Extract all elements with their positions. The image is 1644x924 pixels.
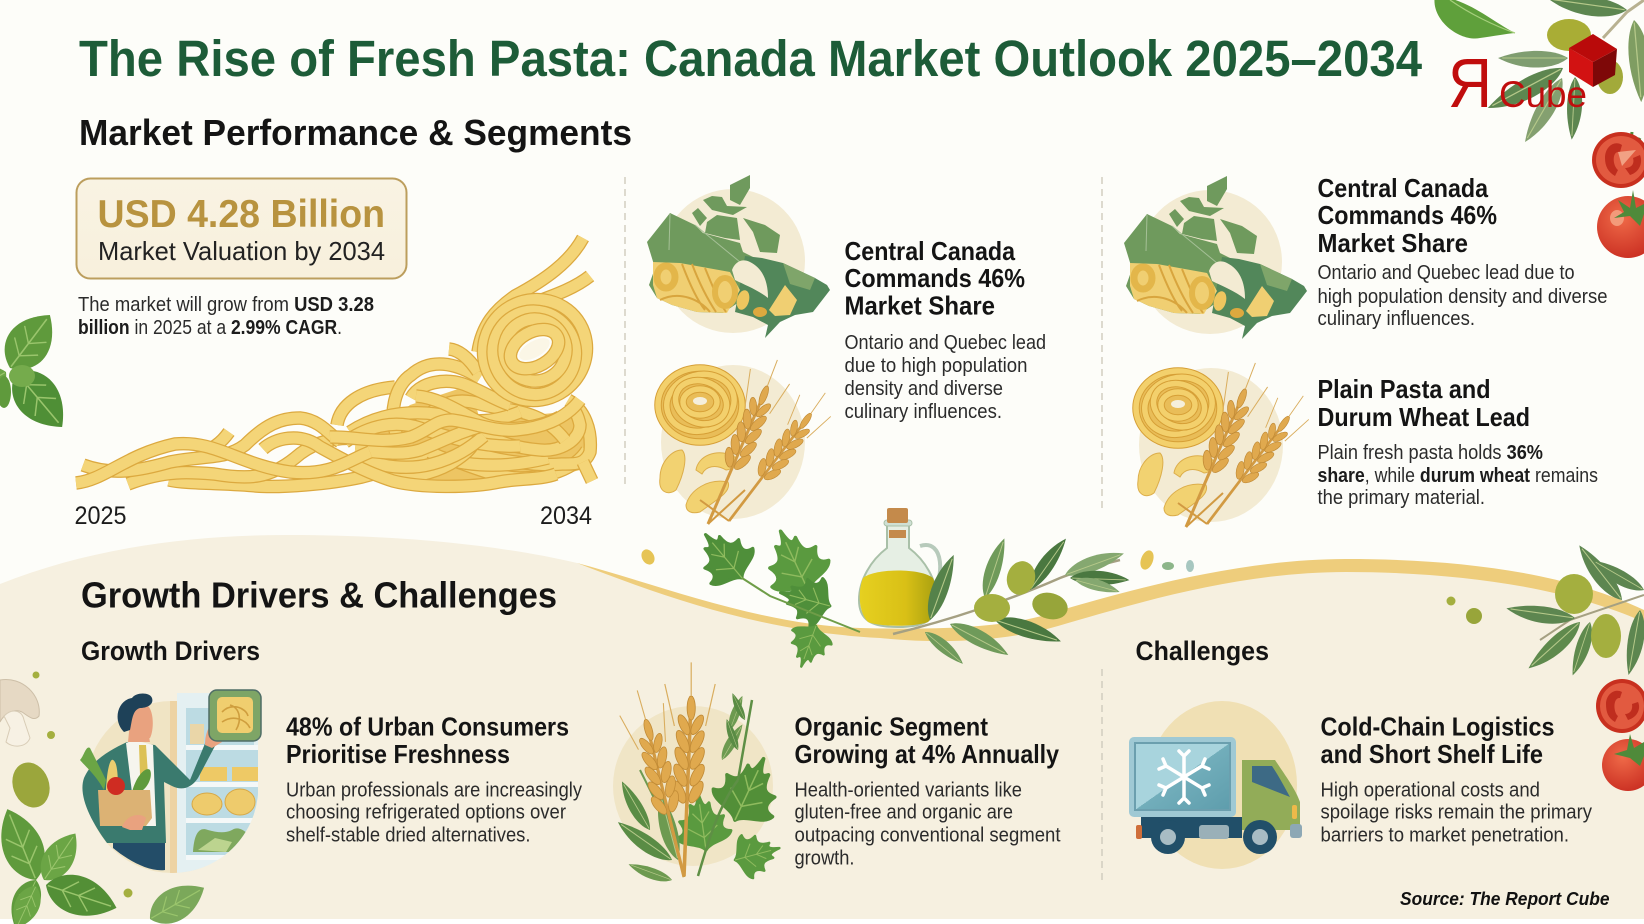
text: central canada description: high population density and diverse bbox=[1318, 285, 1608, 308]
heading: cold-chain bbox=[1320, 712, 1554, 769]
heading: organic segment bbox=[794, 712, 1059, 769]
chart: rising pasta noodles bbox=[76, 238, 605, 487]
heading: urban consumers: Prioritise Freshness bbox=[286, 739, 510, 769]
icon: wheat and herbs bbox=[613, 662, 793, 886]
heading: central canada: Commands 46% bbox=[1318, 200, 1497, 230]
text: cold-chain description: barriers to market penetration. bbox=[1320, 824, 1569, 846]
bottom white strip bbox=[0, 919, 1644, 924]
panel: plain pasta and durum wheat bbox=[1136, 355, 1598, 537]
decoration: right tomatoes bottom bbox=[1596, 679, 1644, 791]
heading: central canada: Commands 46% bbox=[844, 263, 1025, 293]
text: growth summary: The market will grow from USD 3.28 bbox=[78, 293, 374, 316]
icon: olive oil bottle bbox=[859, 508, 940, 627]
text: central canada description: Ontario and Quebec lead due to bbox=[1318, 261, 1574, 284]
panel: cold-chain challenge bbox=[1129, 701, 1593, 869]
text: central canada description: culinary influences. bbox=[844, 400, 1002, 423]
caption: Market Valuation by 2034 bbox=[98, 236, 385, 266]
text: organic segment description: growth. bbox=[794, 846, 854, 870]
icon: canada map bbox=[1124, 176, 1307, 339]
text: organic segment description: Health-oriented variants like bbox=[794, 778, 1022, 802]
logo: wordmark Cube: Cube bbox=[1499, 74, 1587, 115]
text: organic segment description: gluten-free and organic are bbox=[794, 800, 1013, 824]
heading: growth drivers and challenges: Growth Drivers & Challenges bbox=[81, 574, 557, 616]
heading: cold-chain: Cold-Chain Logistics bbox=[1320, 712, 1554, 742]
text: central canada description bbox=[1318, 261, 1608, 330]
decoration: right tomatoes top bbox=[1592, 132, 1644, 258]
panel: organic segment driver bbox=[613, 662, 1061, 886]
heading: organic segment: Organic Segment bbox=[794, 712, 988, 742]
heading: cold-chain: and Short Shelf Life bbox=[1320, 739, 1543, 769]
decoration: mushroom and olive bbox=[0, 672, 132, 898]
panel: urban consumers driver bbox=[80, 690, 583, 873]
heading: central canada: Market Share bbox=[1318, 228, 1468, 258]
text: plain pasta description: the primary material. bbox=[1318, 486, 1485, 509]
panel: central canada (right column) bbox=[1124, 173, 1608, 339]
heading: organic segment: Growing at 4% Annually bbox=[794, 739, 1059, 769]
text: cold-chain description: High operational costs and bbox=[1320, 778, 1540, 802]
subheading: growth drivers: Growth Drivers bbox=[81, 636, 260, 666]
text: urban consumers description: Urban professionals are increasingly bbox=[286, 778, 583, 802]
decoration: bottom-left basil bbox=[0, 802, 212, 924]
icon: pasta and wheat (middle column) bbox=[658, 352, 840, 534]
text: central canada description: Ontario and Quebec lead bbox=[844, 331, 1046, 354]
heading: central canada: Market Share bbox=[844, 290, 995, 320]
decoration: olive branch bbox=[893, 534, 1194, 668]
panel: market valuation callout bbox=[76, 178, 406, 278]
text: plain pasta description: share, while durum wheat remains bbox=[1318, 464, 1598, 487]
logo bbox=[1448, 34, 1617, 122]
panel: central canada (middle column) bbox=[647, 175, 1046, 423]
axis label: 2025: 2025 bbox=[74, 502, 126, 530]
text: central canada description: due to high population bbox=[844, 354, 1028, 377]
icon: pasta and wheat bbox=[1136, 355, 1318, 537]
heading: plain pasta: Durum Wheat Lead bbox=[1318, 402, 1530, 432]
axis label: 2034: 2034 bbox=[540, 502, 592, 530]
text: central canada description: density and diverse bbox=[844, 377, 1003, 400]
text: growth summary: billion in 2025 at a 2.99% CAGR. bbox=[78, 316, 342, 339]
icon: consumer at fridge bbox=[80, 690, 261, 873]
text: urban consumers description: shelf-stable dried alternatives. bbox=[286, 824, 530, 846]
value: USD 4.28 Billion bbox=[98, 193, 385, 236]
heading: central canada: Central Canada bbox=[844, 236, 1015, 266]
title: The Rise of Fresh Pasta: Canada Market Outlook 2025–2034 bbox=[79, 30, 1423, 87]
text: central canada description: culinary influences. bbox=[1318, 307, 1475, 330]
lower section cream wave background bbox=[0, 535, 1644, 919]
heading: central canada bbox=[1318, 173, 1497, 258]
text: urban consumers description: choosing refrigerated options over bbox=[286, 800, 566, 824]
text: organic segment description bbox=[794, 778, 1061, 870]
text: cold-chain description: spoilage risks remain the primary bbox=[1320, 800, 1593, 824]
text: organic segment description: outpacing conventional segment bbox=[794, 824, 1061, 846]
heading: urban consumers: 48% of Urban Consumers bbox=[286, 712, 569, 742]
decoration: top right foliage bbox=[1434, 0, 1644, 147]
text: growth summary bbox=[78, 293, 374, 339]
source note: Source: The Report Cube bbox=[1400, 889, 1610, 909]
heading: market performance: Market Performance & Segments bbox=[79, 112, 632, 153]
logo: cube icon bbox=[1569, 34, 1617, 87]
decoration: right olive branch bbox=[1446, 541, 1644, 678]
logo: wordmark R: Я bbox=[1448, 44, 1492, 122]
heading: central canada: Central Canada bbox=[1318, 173, 1488, 203]
decoration: left basil bbox=[0, 302, 78, 441]
icon: canada map bbox=[647, 175, 830, 338]
text: plain pasta description bbox=[1318, 441, 1598, 509]
text: central canada description bbox=[844, 331, 1046, 423]
heading: plain pasta bbox=[1318, 374, 1530, 432]
decoration: parsley bbox=[639, 517, 860, 674]
text: urban consumers description bbox=[286, 778, 583, 846]
heading: plain pasta: Plain Pasta and bbox=[1318, 374, 1490, 404]
golden ribbon wave bbox=[577, 559, 1644, 641]
subheading: challenges: Challenges bbox=[1136, 636, 1269, 666]
heading: central canada bbox=[844, 236, 1025, 320]
text: plain pasta description: Plain fresh pasta holds 36% bbox=[1318, 441, 1543, 464]
text: cold-chain description bbox=[1320, 778, 1593, 846]
heading: urban consumers bbox=[286, 712, 569, 769]
icon: refrigerated truck bbox=[1129, 701, 1302, 869]
